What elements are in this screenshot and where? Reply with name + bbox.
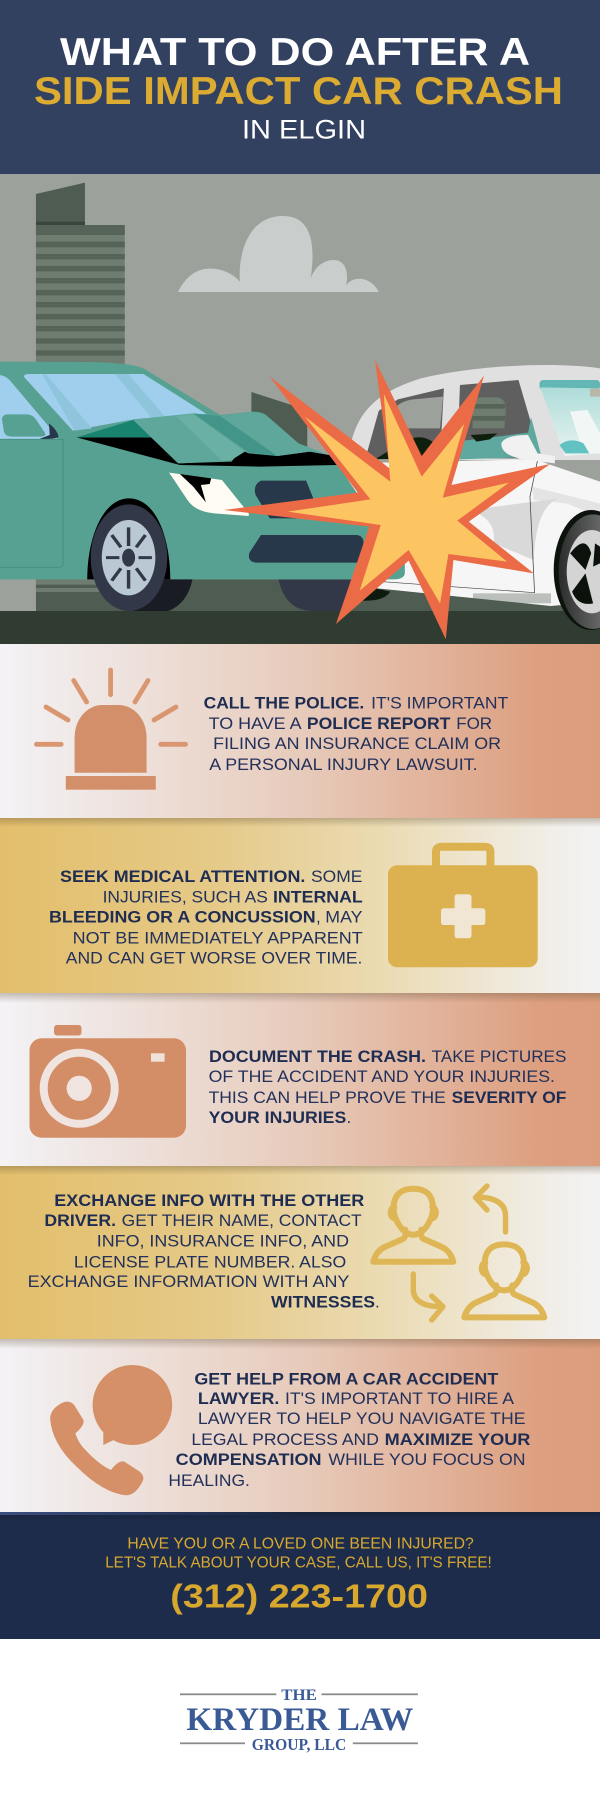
arrow: bottom left (413, 1274, 443, 1320)
text: get help: IT'S IMPORTANT TO HIRE A (285, 1389, 515, 1408)
text: exchange info: EXCHANGE INFO WITH THE OTHER (54, 1191, 364, 1210)
text: get help: HEALING. (168, 1471, 250, 1490)
panel: seek medical attention (0, 818, 600, 993)
panel: call the police (0, 644, 600, 818)
text: seek medical attention: AND CAN GET WORSE OVER TIME. (66, 948, 362, 967)
panel: exchange info (0, 1166, 600, 1339)
call to action panel (0, 1512, 600, 1639)
text: get help: GET HELP FROM A CAR ACCIDENT (194, 1369, 499, 1388)
text: seek medical attention: SEEK MEDICAL ATTENTION. (60, 867, 305, 886)
text: get help: MAXIMIZE YOUR (385, 1430, 530, 1449)
teal car (0, 362, 405, 611)
icon: camera (30, 1025, 186, 1138)
text: document the crash: SEVERITY OF (452, 1088, 566, 1107)
text: call the police: A PERSONAL INJURY LAWSUIT. (209, 755, 478, 774)
hero illustration: car crash (0, 174, 600, 644)
text: exchange info: GET THEIR NAME, CONTACT (122, 1211, 362, 1230)
text: document the crash: . (346, 1108, 351, 1127)
logo: the Kryder Law Group: KRYDER LAW (186, 1702, 413, 1738)
text: document the crash: OF THE ACCIDENT AND YOUR INJURIES. (209, 1067, 555, 1086)
logo: the Kryder Law Group (0, 1639, 600, 1798)
phone number: (312) 223-1700 (170, 1578, 428, 1615)
text: exchange info: INFO, INSURANCE INFO, AND (97, 1231, 349, 1250)
text: document the crash: TAKE PICTURES (432, 1047, 566, 1066)
text: seek medical attention: BLEEDING OR A CONCUSSION (49, 907, 316, 926)
panel: get help from a lawyer (0, 1339, 600, 1512)
text: get help: WHILE YOU FOCUS ON (328, 1450, 526, 1469)
text: exchange info: WITNESSES (271, 1293, 375, 1312)
cloud (178, 216, 379, 292)
text: exchange info: DRIVER. (44, 1211, 116, 1230)
icon: two people exchanging info (373, 1186, 544, 1320)
text: get help: LAWYER TO HELP YOU NAVIGATE THE (198, 1409, 526, 1428)
text: call the police: FOR (456, 714, 492, 733)
text: seek medical attention: , (316, 907, 321, 926)
text: get help: COMPENSATION (176, 1450, 322, 1469)
header panel (0, 0, 600, 174)
subtitle: in Elgin: IN ELGIN (242, 115, 366, 145)
icon: phone with speech bubble (50, 1365, 172, 1495)
text: seek medical attention: MAY (325, 907, 362, 926)
cta text (105, 1535, 492, 1571)
arrow: top right (476, 1186, 506, 1232)
text: call the police: POLICE REPORT (307, 714, 451, 733)
text: get help: LAWYER. (198, 1389, 279, 1408)
logo: the Kryder Law Group: THE (281, 1687, 317, 1704)
cta text: LET'S TALK ABOUT YOUR CASE, CALL US, IT'S FREE! (105, 1554, 492, 1571)
text: call the police: IT'S IMPORTANT (371, 693, 508, 712)
cta text: HAVE YOU OR A LOVED ONE BEEN INJURED? (127, 1535, 474, 1552)
text: document the crash: DOCUMENT THE CRASH. (209, 1047, 426, 1066)
title line: what to do after a: WHAT TO DO AFTER A (60, 31, 530, 74)
text: call the police: FILING AN INSURANCE CLAIM OR (213, 734, 501, 753)
logo: the Kryder Law Group: GROUP, LLC (252, 1735, 346, 1754)
text: get help (168, 1369, 530, 1490)
text: seek medical attention: SOME (311, 867, 362, 886)
text: document the crash: YOUR INJURIES (209, 1108, 346, 1127)
text: exchange info: . (375, 1293, 380, 1312)
title line: side impact car crash: SIDE IMPACT CAR CRASH (34, 70, 563, 113)
text: seek medical attention: INJURIES, SUCH AS (103, 887, 268, 906)
white car (302, 365, 600, 630)
text: seek medical attention (49, 867, 363, 967)
skyline building (36, 183, 600, 611)
text: call the police: TO HAVE A (209, 714, 302, 733)
text: seek medical attention: NOT BE IMMEDIATELY APPARENT (73, 928, 363, 947)
text: exchange info: EXCHANGE INFORMATION WITH ANY (28, 1272, 349, 1291)
front wheel (87, 498, 192, 611)
text: document the crash: THIS CAN HELP PROVE THE (209, 1088, 446, 1107)
road (0, 611, 600, 644)
text: call the police (204, 693, 508, 774)
explosion star (224, 360, 550, 639)
panel: document the crash (0, 993, 600, 1166)
icon: medical kit (388, 847, 538, 967)
icon: siren (36, 670, 186, 790)
text: exchange info (28, 1191, 380, 1312)
text: seek medical attention: INTERNAL (273, 887, 363, 906)
text: document the crash (209, 1047, 566, 1127)
text: get help: LEGAL PROCESS AND (191, 1430, 379, 1449)
text: exchange info: LICENSE PLATE NUMBER. ALSO (74, 1252, 346, 1271)
text: call the police: CALL THE POLICE. (204, 693, 364, 712)
